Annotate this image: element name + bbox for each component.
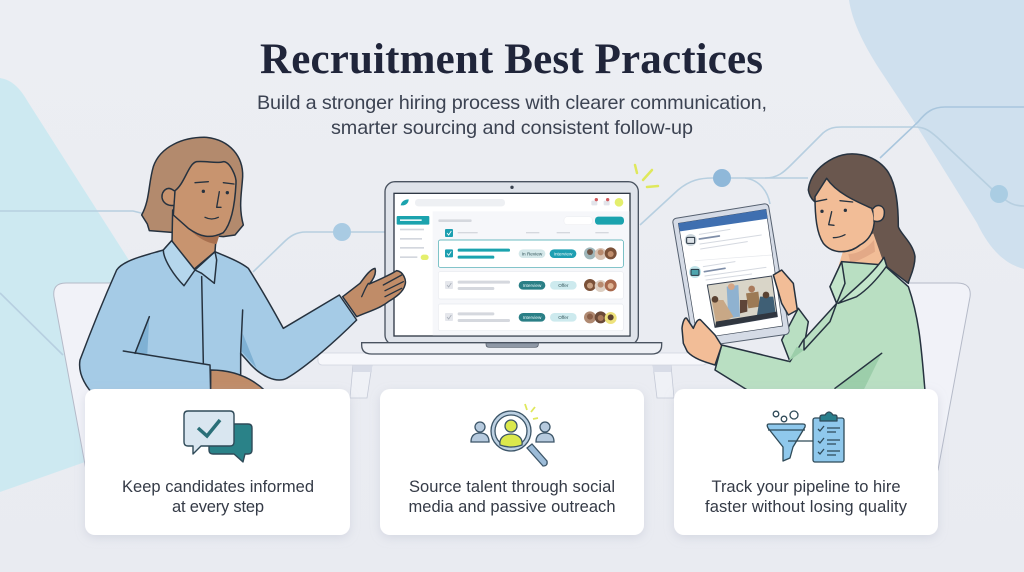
background network lines bbox=[0, 107, 1024, 355]
card text: Source talent through social bbox=[409, 478, 615, 496]
node: centre right bbox=[713, 169, 731, 187]
candidate row 3: Interview bbox=[523, 315, 542, 320]
candidate row 2: Interview bbox=[523, 283, 542, 288]
candidate row 3: Offer bbox=[558, 315, 569, 320]
subtitle: Build a stronger hiring process with clearer communication, bbox=[257, 92, 767, 114]
card text: at every step bbox=[172, 498, 264, 516]
sparkle above laptop bbox=[635, 165, 658, 187]
hand bbox=[343, 268, 405, 317]
card: source talent bbox=[380, 389, 644, 535]
subtitle: smarter sourcing and consistent follow-up bbox=[331, 117, 693, 139]
table bbox=[318, 353, 707, 398]
chair: right bbox=[870, 283, 970, 470]
chair: left bbox=[54, 283, 150, 470]
candidate row 1: In Review bbox=[522, 251, 543, 256]
laptop screen bbox=[394, 193, 630, 336]
tablet bbox=[677, 208, 785, 343]
title: Recruitment Best Practices bbox=[260, 36, 763, 83]
node: left bbox=[333, 223, 351, 241]
card text: Track your pipeline to hire bbox=[712, 478, 900, 496]
hand gripping tablet edge bbox=[773, 270, 797, 315]
icon: chat bubbles with check bbox=[184, 411, 252, 462]
card: keep candidates informed bbox=[85, 389, 350, 535]
background shape: blue top right bbox=[849, 0, 1024, 269]
card text: media and passive outreach bbox=[408, 498, 616, 516]
tablet-holding hand bbox=[682, 318, 722, 365]
card text: faster without losing quality bbox=[705, 498, 908, 516]
card text bbox=[408, 478, 616, 516]
candidate row 3 bbox=[438, 304, 623, 331]
candidate row 1 bbox=[438, 240, 623, 267]
card text: Keep candidates informed bbox=[122, 478, 314, 496]
candidate row 1: Interview bbox=[554, 251, 573, 256]
icon: magnifier with candidates bbox=[471, 404, 554, 466]
node: far right bbox=[990, 185, 1008, 203]
card: track pipeline bbox=[674, 389, 938, 535]
laptop bbox=[362, 182, 662, 354]
background shape: teal left bbox=[0, 78, 150, 492]
person: left presenter bbox=[80, 137, 405, 391]
subtitle bbox=[257, 92, 767, 139]
person: right with tablet bbox=[677, 154, 925, 391]
candidate row 2 bbox=[438, 272, 623, 299]
card text bbox=[122, 478, 314, 516]
candidate row 2: Offer bbox=[558, 283, 569, 288]
icon: funnel and checklist bbox=[767, 411, 844, 462]
card text bbox=[705, 478, 908, 516]
